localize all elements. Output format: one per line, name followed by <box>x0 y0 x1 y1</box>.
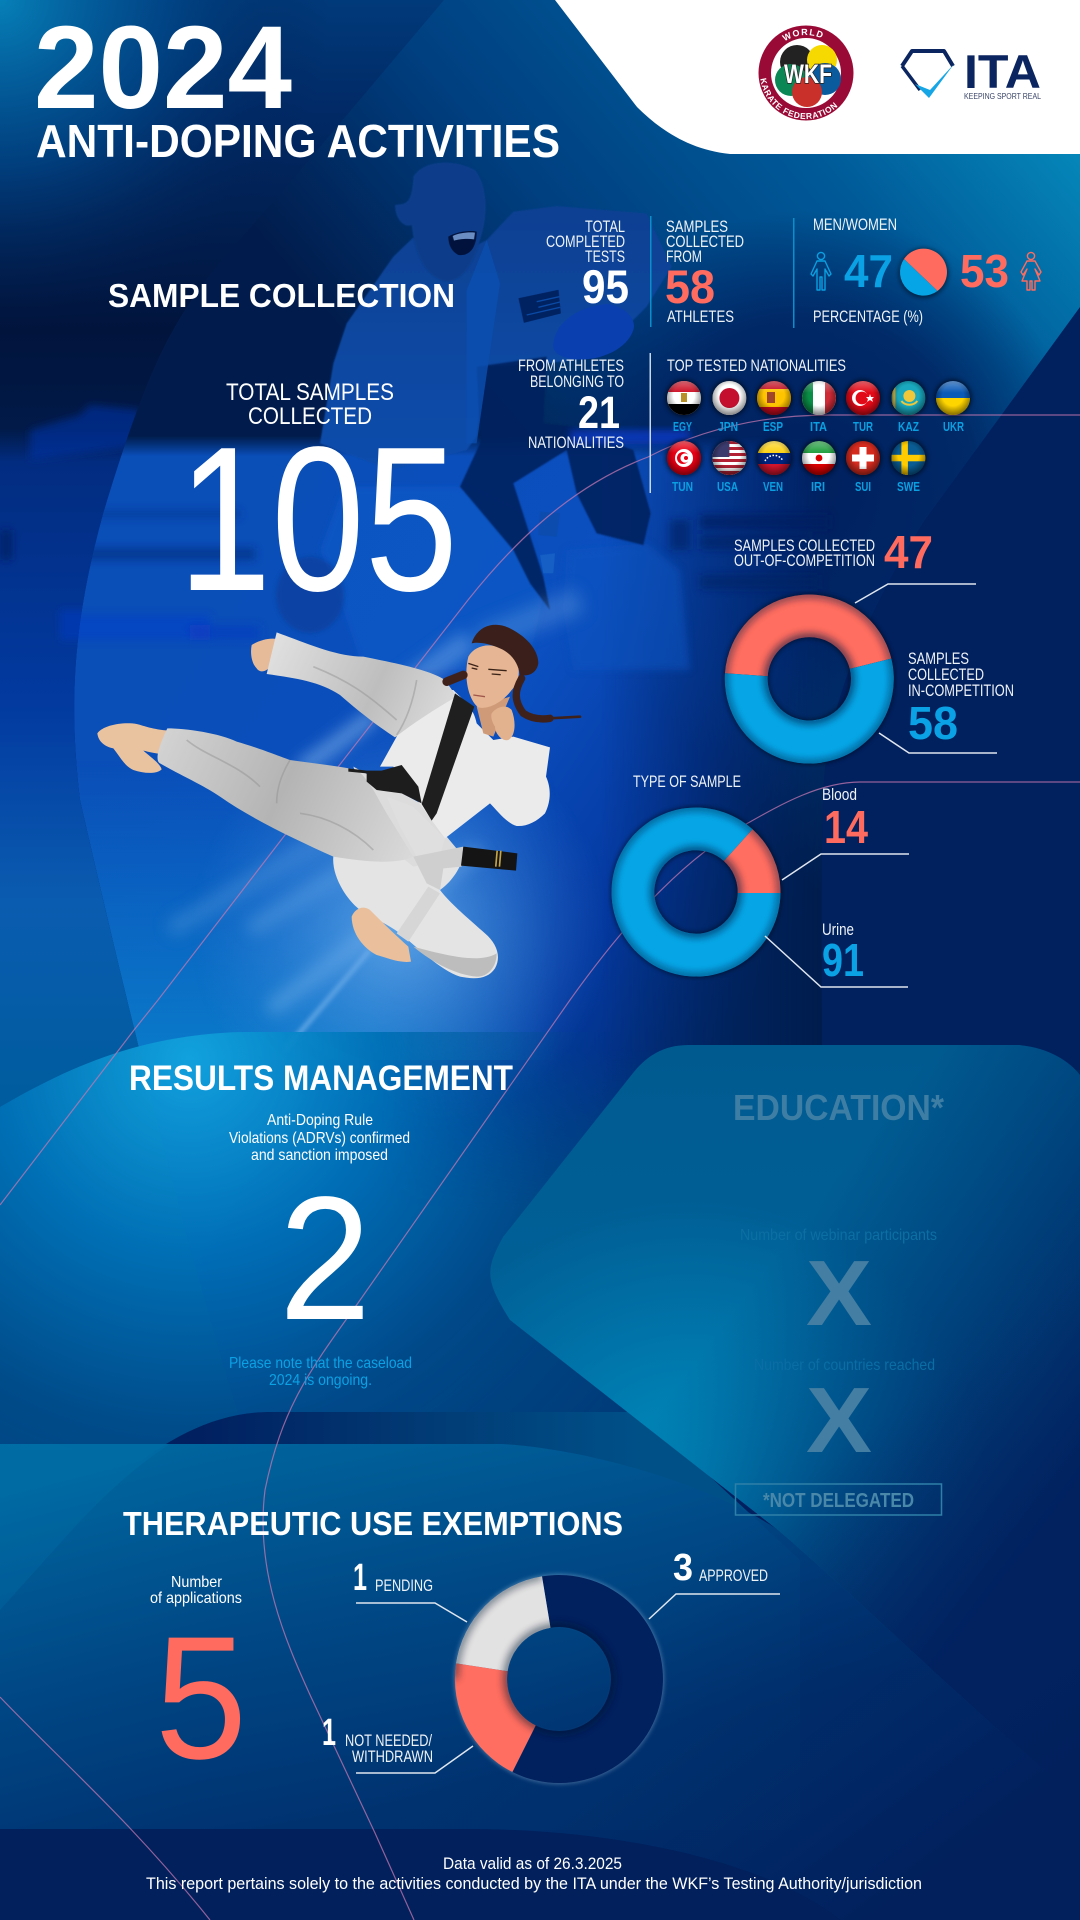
background: navy shadow right <box>500 200 1080 800</box>
number: x: X <box>806 1368 872 1472</box>
WKF logo: KARATE FEDERATION <box>760 78 838 120</box>
stat: samples collected from athletes <box>665 217 744 326</box>
icon: woman <box>1021 252 1041 290</box>
hand near chin <box>491 707 515 740</box>
heading: type of sample: TYPE OF SAMPLE <box>633 772 741 791</box>
fighter: dark sleeve and belt <box>460 357 651 610</box>
background: lighter wedge left of arch <box>0 1444 170 1610</box>
stat: nationalities: BELONGING TO <box>530 372 624 391</box>
WKF logo <box>758 26 854 120</box>
text: ADRV description: Anti-Doping Rule <box>267 1112 373 1129</box>
face <box>466 645 519 708</box>
background: second fighter head <box>276 557 344 633</box>
ITA logo: KEEPING SPORT REAL <box>964 91 1041 101</box>
text: webinar participants: Number of webinar participants <box>740 1227 937 1244</box>
fighter: mouth <box>448 231 477 255</box>
neck and chest <box>477 697 510 737</box>
leader line <box>649 1594 780 1619</box>
label: not needed / withdrawn: NOT NEEDED/ <box>345 1731 432 1750</box>
background: sharp ray <box>285 950 370 1050</box>
background: light rays <box>170 600 580 1010</box>
stat: samples collected from athletes: SAMPLES <box>666 217 728 236</box>
labels: in-competition: IN-COMPETITION <box>908 681 1014 700</box>
top tested nationalities: TUR <box>853 419 873 434</box>
top tested nationalities: UKR <box>943 419 964 434</box>
leader line <box>356 1603 467 1622</box>
top tested nationalities: USA <box>717 479 738 494</box>
flag: EGY <box>665 379 703 417</box>
flag: TUR <box>844 379 882 417</box>
number: x: X <box>806 1241 872 1345</box>
label: approved <box>649 1547 780 1619</box>
donut chart: TUE status <box>455 1575 663 1783</box>
top tested nationalities: EGY <box>673 419 692 434</box>
title: 2024 <box>34 2 292 134</box>
top tested nationalities: IRI <box>811 479 825 494</box>
number: ADRVs: 2 <box>279 1161 371 1357</box>
top tested nationalities <box>665 356 972 494</box>
note: caseload: Please note that the caseload <box>229 1355 412 1372</box>
flag: TUN <box>665 439 703 477</box>
heading: therapeutic use exemptions: THERAPEUTIC USE EXEMPTIONS <box>123 1505 623 1542</box>
fighter: head <box>395 162 486 282</box>
flag: SUI <box>844 439 882 477</box>
flag: VEN <box>755 439 793 477</box>
belt tail <box>461 847 517 871</box>
labels: out-of-competition <box>734 526 976 603</box>
right sleeve and torso <box>380 690 550 838</box>
pie: men vs women <box>899 248 949 298</box>
stat: samples collected from athletes: 58 <box>665 260 715 313</box>
divider <box>650 353 651 493</box>
braids <box>447 675 580 719</box>
stat: samples collected from athletes: FROM <box>666 247 702 266</box>
background: faded fighter silhouette <box>320 162 690 670</box>
stat: total completed tests: TOTAL <box>585 217 625 236</box>
stat: samples collected from athletes: COLLECTED <box>666 232 744 251</box>
badge: not delegated <box>736 1484 942 1515</box>
foot <box>97 723 169 773</box>
extended leg <box>158 728 413 862</box>
flag: ESP <box>755 379 793 417</box>
top tested nationalities: JPN <box>718 419 738 434</box>
belt knot <box>348 765 422 803</box>
fighter: lapel <box>467 240 500 443</box>
lower leg shading <box>413 947 497 977</box>
background: left dark panel <box>0 0 460 1450</box>
labels: blood: 14 <box>824 801 868 853</box>
leader line <box>765 936 908 987</box>
background: glowing streak behind stats <box>570 430 690 444</box>
total samples number: 105 <box>178 404 458 634</box>
men/women panel: MEN/WOMEN <box>813 215 897 234</box>
background: dark arch <box>0 1412 800 1830</box>
heading: sample collection: SAMPLE COLLECTION <box>108 277 455 314</box>
background: education panel <box>490 1045 1080 1800</box>
top tested nationalities: SUI <box>855 479 871 494</box>
icon: man <box>811 252 831 290</box>
top tested nationalities: ITA <box>810 419 828 434</box>
men/women panel: 47 <box>844 245 893 297</box>
text: ADRV description: Violations (ADRVs) confirmed <box>229 1130 410 1147</box>
WKF logo: WKF <box>784 59 832 89</box>
label: pending: PENDING <box>375 1576 433 1595</box>
total samples label: COLLECTED <box>248 403 372 430</box>
title: ANTI-DOPING ACTIVITIES <box>36 115 560 167</box>
top tested nationalities: TOP TESTED NATIONALITIES <box>667 356 846 375</box>
top tested nationalities: SWE <box>897 479 920 494</box>
stat: samples collected from athletes: ATHLETES <box>667 307 734 326</box>
stat: nationalities <box>518 356 624 452</box>
extended sleeve <box>267 632 457 737</box>
leader line <box>879 733 997 753</box>
footer text: This report pertains solely to the activities conducted by the ITA under the WKF’s Testing Authority/jurisdiction <box>146 1874 922 1893</box>
fighter: USA patch <box>519 290 561 323</box>
donut chart: type of sample <box>612 808 781 977</box>
stat: nationalities: FROM ATHLETES <box>518 356 624 375</box>
labels: in-competition: 58 <box>908 697 958 749</box>
labels: out-of-competition: 47 <box>884 526 933 578</box>
leader line <box>782 854 909 880</box>
divider <box>793 218 794 328</box>
ITA logo: ITA <box>964 45 1041 98</box>
labels: in-competition: COLLECTED <box>908 665 984 684</box>
flag: KAZ <box>889 379 927 417</box>
label: approved: 3 <box>673 1547 693 1589</box>
background: blue floor in main panel <box>74 438 804 1190</box>
text: ADRV description: and sanction imposed <box>251 1147 388 1164</box>
top tested nationalities: ESP <box>763 419 783 434</box>
stat: total completed tests: 95 <box>582 260 629 313</box>
bent leg cuff <box>397 887 440 942</box>
second foot <box>352 908 411 962</box>
labels: urine <box>765 920 908 987</box>
fist <box>251 639 278 671</box>
flag: IRI <box>800 439 838 477</box>
flag: UKR <box>934 379 972 417</box>
fighter: gi body <box>320 206 672 470</box>
flag: ITA <box>800 379 838 417</box>
torso filler <box>353 767 463 867</box>
background: lower section <box>0 1444 1080 1920</box>
background: blurred arena signage <box>65 510 830 640</box>
divider <box>650 216 652 327</box>
label: not needed / withdrawn: WITHDRAWN <box>352 1747 433 1766</box>
background: dark lower right <box>300 1200 1080 1920</box>
labels: blood <box>782 785 909 880</box>
gi lapel <box>387 797 445 857</box>
text: number of applications <box>150 1574 242 1607</box>
stat: total completed tests <box>546 217 629 313</box>
note: caseload <box>229 1355 412 1389</box>
text: number of applications: Number <box>171 1574 223 1591</box>
fighter: belt label <box>538 512 560 537</box>
top tested nationalities: TUN <box>672 479 693 494</box>
labels: blood: Blood <box>822 785 857 804</box>
hair <box>472 625 538 675</box>
flag: JPN <box>710 379 748 417</box>
black belt across chest <box>422 693 474 821</box>
fighter: other athlete lower body <box>320 487 547 670</box>
labels: out-of-competition: SAMPLES COLLECTED <box>734 536 875 555</box>
illustration: karate athlete <box>97 625 580 978</box>
footer text <box>146 1854 922 1893</box>
flag: USA <box>710 439 748 477</box>
text: countries reached: Number of countries reached <box>754 1357 935 1374</box>
leader line <box>855 584 976 603</box>
label: not needed / withdrawn: 1 <box>322 1712 336 1754</box>
ITA logo <box>902 45 1041 101</box>
labels: in-competition: SAMPLES <box>908 649 969 668</box>
header white corner <box>555 0 1080 154</box>
note: caseload: 2024 is ongoing. <box>269 1372 372 1389</box>
top tested nationalities: VEN <box>763 479 783 494</box>
badge: not delegated: *NOT DELEGATED <box>763 1490 914 1512</box>
fighter: glove <box>553 304 634 359</box>
stat: nationalities: 21 <box>578 387 620 438</box>
background: results section <box>0 1032 660 1450</box>
label: not needed / withdrawn <box>322 1712 473 1773</box>
stat: total completed tests: COMPLETED <box>546 232 625 251</box>
labels: urine: 91 <box>822 934 864 986</box>
WKF logo: WORLD <box>782 28 823 40</box>
background: main curved panel <box>74 0 1080 1450</box>
background: footer band <box>0 1829 840 1920</box>
background: right navy band <box>822 307 1080 1070</box>
labels: in-competition <box>879 649 1014 753</box>
decorative curved lines <box>0 415 1080 1920</box>
leg wrinkles <box>187 667 417 850</box>
label: pending: 1 <box>353 1557 367 1599</box>
top tested nationalities: KAZ <box>898 419 919 434</box>
total samples label <box>226 379 394 430</box>
heading: results management: RESULTS MANAGEMENT <box>129 1059 513 1098</box>
men/women panel: 53 <box>960 245 1009 297</box>
heading: education: EDUCATION* <box>733 1087 944 1128</box>
stat: total completed tests: TESTS <box>585 247 625 266</box>
background: blurred crowd left <box>0 405 145 640</box>
lower bent leg and gi <box>333 833 498 978</box>
number: applications: 5 <box>155 1601 247 1796</box>
donut chart: samples by competition <box>725 594 894 764</box>
text: number of applications: of applications <box>150 1590 242 1607</box>
title <box>34 2 560 167</box>
label: pending <box>353 1557 467 1622</box>
leader line <box>356 1746 473 1773</box>
labels: out-of-competition: OUT-OF-COMPETITION <box>734 551 875 570</box>
facial features <box>468 663 507 697</box>
stat: nationalities: NATIONALITIES <box>528 433 624 452</box>
text: ADRV description <box>229 1112 410 1164</box>
label: approved: APPROVED <box>699 1566 768 1585</box>
labels: urine: Urine <box>822 920 854 939</box>
men/women panel <box>811 215 1041 326</box>
flag: SWE <box>889 439 927 477</box>
men/women panel: PERCENTAGE (%) <box>813 307 923 326</box>
footer text: Data valid as of 26.3.2025 <box>443 1854 622 1873</box>
total samples label: TOTAL SAMPLES <box>226 379 394 406</box>
